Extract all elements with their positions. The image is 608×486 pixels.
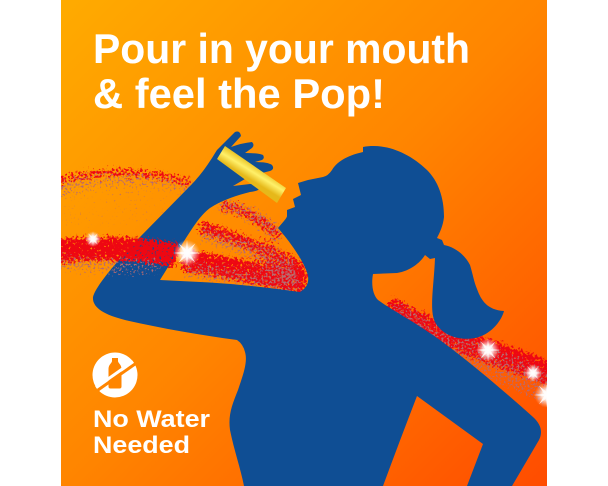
title — [93, 25, 470, 117]
icon: no water bottle — [92, 352, 138, 398]
no water needed label: Needed — [93, 432, 190, 459]
yellow stick sachet — [217, 146, 286, 203]
title: Pour in your mouth — [93, 25, 470, 72]
red powder behind the figure — [50, 173, 555, 392]
panel: orange gradient background — [61, 0, 547, 486]
infographic canvas — [61, 0, 547, 486]
sparkles — [85, 231, 561, 408]
no water needed label: No Water — [93, 406, 210, 433]
title: & feel the Pop! — [93, 70, 385, 117]
powder drifting across the forearm — [50, 249, 180, 267]
no water needed label — [93, 406, 210, 459]
woman silhouette — [93, 132, 541, 486]
